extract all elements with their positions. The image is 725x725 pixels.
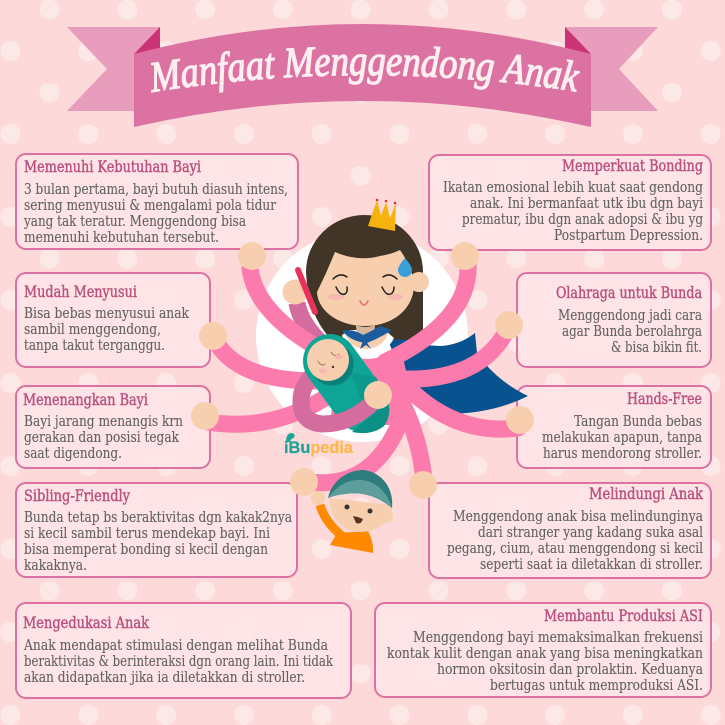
panel: Olahraga untuk Bunda	[517, 273, 711, 367]
mouth	[360, 301, 368, 305]
illustration: cradling arm back part	[301, 376, 322, 424]
left ribbon fold	[134, 27, 160, 54]
chest skin	[345, 333, 388, 349]
panel: Melindungi Anak	[429, 483, 711, 578]
scarf	[342, 326, 392, 349]
panel: Menenangkan Bayi: Bayi jarang menangis krn	[24, 413, 183, 430]
panel: Memenuhi Kebutuhan Bayi: 3 bulan pertama, bayi butuh diasuh intens,	[24, 181, 288, 198]
panel: Sibling-Friendly: bisa memperat bonding si kecil dengan	[24, 541, 268, 558]
panel: Sibling-Friendly: Sibling-Friendly	[24, 487, 130, 505]
panel: Menenangkan Bayi: gerakan dan posisi tegak	[24, 429, 179, 446]
right ribbon tail	[565, 27, 658, 111]
panel: Memenuhi Kebutuhan Bayi: sering menyusui & mengalami pola tidur	[24, 197, 276, 214]
child face	[329, 498, 392, 532]
child arm	[320, 505, 342, 536]
panel: Mengedukasi Anak: beraktivitas & berinteraksi dgn orang lain. Ini tidak	[24, 653, 333, 670]
ears	[409, 272, 429, 292]
crown	[368, 199, 396, 231]
panel: Hands-Free: Tangan Bunda bebas	[574, 413, 702, 430]
raised arm holding spoon	[282, 270, 320, 342]
illustration: white circle backdrop	[256, 230, 468, 442]
child hat	[328, 470, 392, 508]
ribbon band	[134, 24, 591, 127]
panel: Mudah Menyusui: sambil menggendong,	[24, 321, 161, 338]
panel: Memenuhi Kebutuhan Bayi: memenuhi kebutuhan tersebut.	[24, 229, 219, 246]
panel: Mudah Menyusui	[16, 273, 210, 367]
right ribbon fold	[565, 27, 591, 54]
hands	[191, 242, 534, 499]
panel: Mudah Menyusui: Mudah Menyusui	[24, 283, 137, 301]
panel: Mengedukasi Anak	[16, 603, 351, 698]
cape	[377, 325, 528, 414]
panel: Melindungi Anak: Melindungi Anak	[589, 485, 704, 503]
neck	[356, 325, 375, 338]
child ear	[381, 511, 393, 523]
logo: iBupedia: iBupedia	[284, 438, 354, 457]
panel: Hands-Free	[517, 386, 711, 468]
panel: Sibling-Friendly: si kecil sambil terus mendekap bayi. Ini	[24, 525, 270, 542]
panel: Menenangkan Bayi: saat digendong.	[24, 445, 122, 462]
closed eyes and brows	[333, 275, 397, 294]
illustration: swaddled baby	[307, 339, 389, 433]
illustration: older child	[311, 470, 393, 553]
baby face	[307, 339, 349, 381]
hair	[306, 215, 423, 340]
title: Manfaat Menggendong Anak	[151, 46, 580, 93]
child eyes and mouth	[344, 504, 350, 510]
pink arms	[208, 262, 518, 483]
panel: Menenangkan Bayi: Menenangkan Bayi	[23, 391, 148, 409]
panel: Hands-Free: Hands-Free	[627, 390, 702, 408]
panel: Memenuhi Kebutuhan Bayi: Memenuhi Kebutuhan Bayi	[24, 158, 201, 176]
panel: Memenuhi Kebutuhan Bayi	[16, 154, 298, 249]
white collar	[342, 330, 394, 354]
sweat drop	[398, 258, 412, 277]
panel: Memenuhi Kebutuhan Bayi: yang tak teratur. Menggendong bisa	[23, 213, 246, 230]
panel: Mudah Menyusui: tanpa takut terganggu.	[24, 337, 165, 354]
panel: Memperkuat Bonding	[429, 155, 711, 250]
illustration: arm cradling baby	[320, 381, 392, 424]
cheeks	[328, 294, 403, 300]
panel: Mengedukasi Anak: Anak mendapat stimulasi dengan melihat Bunda	[23, 637, 328, 654]
panel: Membantu Produksi ASI	[375, 603, 711, 697]
panel: Sibling-Friendly: kakaknya.	[24, 557, 87, 574]
panel: Sibling-Friendly	[16, 483, 297, 577]
panel: Mengedukasi Anak: akan didapatkan jika ia diletakkan di stroller.	[24, 669, 305, 686]
left ribbon tail	[67, 27, 160, 111]
panel: Olahraga untuk Bunda: & bisa bikin fit.	[611, 339, 702, 356]
panel: Sibling-Friendly: Bunda tetap bs beraktivitas dgn kakak2nya	[24, 509, 292, 526]
child shirt	[330, 531, 373, 553]
torso	[330, 346, 412, 425]
illustration: mother with many arms	[191, 199, 534, 499]
title banner	[67, 24, 658, 127]
panel: Menenangkan Bayi	[16, 386, 210, 468]
panel: Mengedukasi Anak: Mengedukasi Anak	[23, 614, 150, 632]
face	[317, 250, 414, 326]
panel: Mudah Menyusui: Bisa bebas menyusui anak	[24, 305, 189, 322]
